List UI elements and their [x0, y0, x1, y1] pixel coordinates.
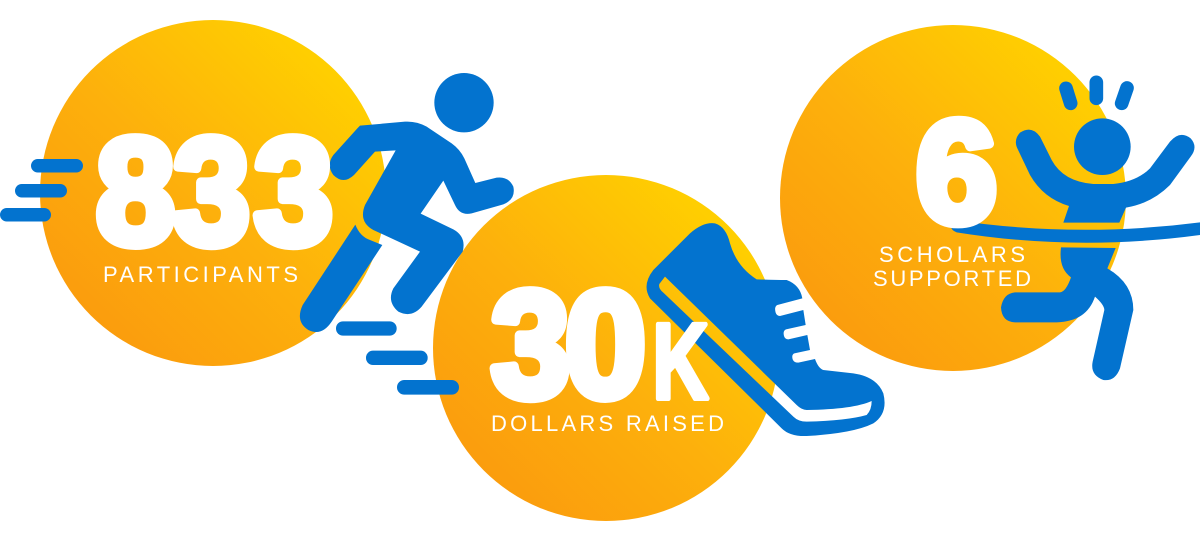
stat: 833: [96, 106, 333, 276]
label: participants: PARTICIPANTS: [103, 262, 298, 287]
stat: 30k: [491, 260, 708, 428]
icon: runner: [300, 73, 514, 395]
icon: speed lines left: [0, 159, 83, 222]
label: scholars supported: SCHOLARS: [879, 242, 1025, 267]
circle: dollars raised: [433, 175, 779, 521]
icon: finisher crossing ribbon: [951, 82, 1200, 380]
circle: scholars supported: [780, 25, 1126, 371]
stat: 833: 8: [96, 106, 175, 276]
stat: 6: 6: [916, 91, 997, 253]
label: dollars raised: DOLLARS RAISED: [491, 411, 724, 436]
label: scholars supported: [873, 242, 1031, 291]
stat: 833: 3: [254, 106, 333, 276]
icon: running shoe: [647, 223, 885, 436]
stat: 30k: K: [652, 300, 708, 422]
label: scholars supported: SUPPORTED: [873, 266, 1031, 291]
circle: participants: [40, 20, 386, 366]
stat: 833: 3: [173, 106, 250, 276]
stat: 30k: 3: [491, 260, 570, 428]
stat: 30k: 0: [565, 260, 646, 428]
